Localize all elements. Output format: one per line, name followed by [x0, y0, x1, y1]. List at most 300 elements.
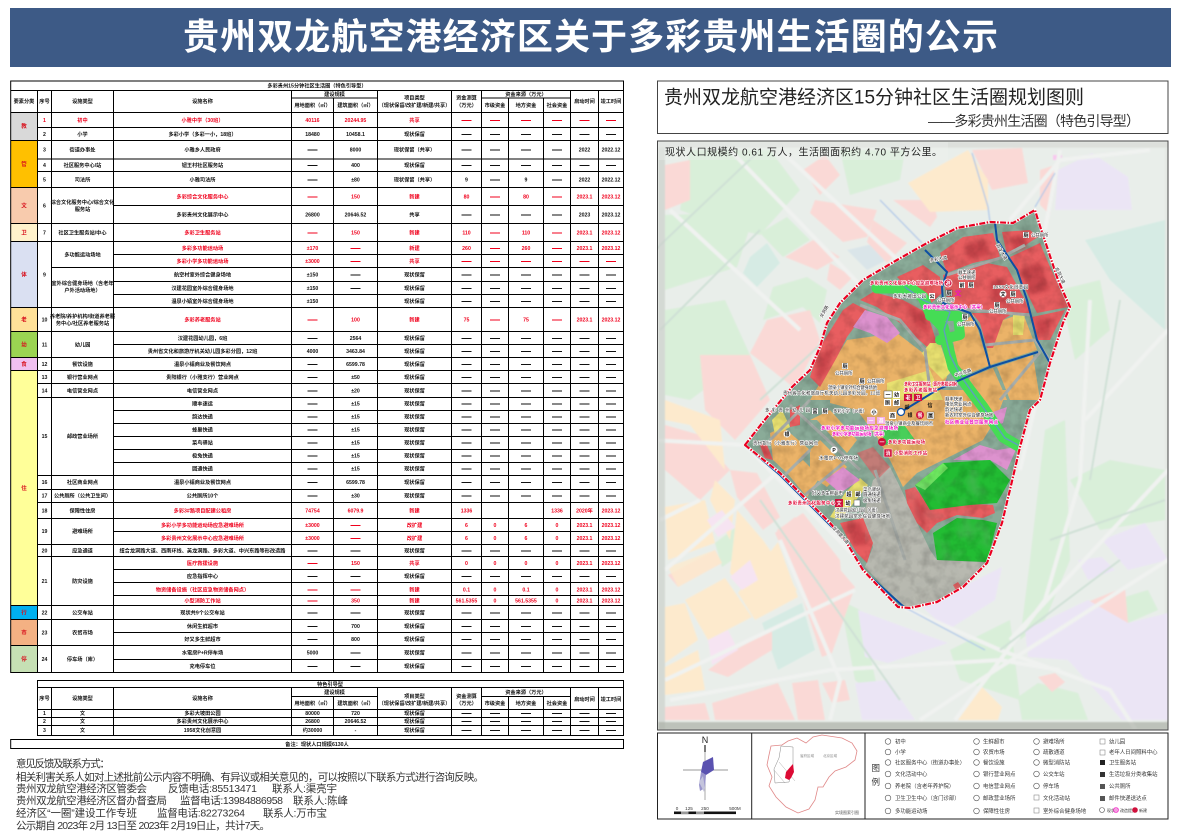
- row 9 体育场地: 多彩多功能运动场: [182, 244, 223, 252]
- legend heading: [872, 763, 880, 787]
- row 19 避难场所: 6: [525, 523, 528, 529]
- legend items: 公共厕所: [1109, 782, 1131, 790]
- legend items: 社区服务中心（街道办事处）: [895, 758, 965, 766]
- row 9 体育场地: 户外活动场地）: [64, 286, 101, 294]
- row 7 社区卫生服务站: 110: [462, 230, 471, 236]
- row 1 初中: ——————: [462, 115, 616, 126]
- row 15 邮政营业场所: 15: [42, 434, 47, 440]
- row 19 避难场所: ±3000: [305, 536, 320, 542]
- map labels: 菜鸟驿站: [863, 486, 881, 493]
- row 19 避难场所: 0: [556, 536, 559, 542]
- row 19 避难场所: [42, 520, 620, 544]
- contact text block: 公示期自 2023年 2月 13日至 2023年 2月19日止，共计7天。: [16, 819, 270, 832]
- row 1 初中: 1: [43, 118, 46, 124]
- map icons: 邮: [894, 400, 899, 406]
- row 9 体育场地: 2023.1: [577, 246, 593, 252]
- location map: 实境图索引图: [835, 809, 859, 815]
- contact text block: 监督电话:13984886958: [180, 794, 283, 807]
- row 5 司法所: [43, 174, 620, 186]
- location map: [767, 735, 859, 815]
- row 5 司法所: 2022.12: [602, 178, 620, 184]
- row 18 保障性住房: [42, 506, 620, 514]
- table category color cells: 食: [21, 360, 27, 368]
- row 22 公交车站: 现状保留: [404, 608, 425, 616]
- table column headers: 地方资金: [516, 101, 537, 109]
- map labels: 汉建花园室外综合健身场地: [835, 512, 891, 520]
- row 21 防灾设施: 医疗救援设施: [187, 559, 219, 567]
- table category color cells: 卫: [21, 230, 27, 236]
- row 2 小学: 小学: [77, 130, 88, 138]
- contact text block: 联系人:渠亮宇: [272, 782, 337, 795]
- row 3 街道办事处: 3: [43, 148, 46, 154]
- map icons: 厕: [962, 314, 968, 321]
- featured table headers: 竣工时间: [601, 695, 621, 703]
- row 13 银行营业网点: ±50: [351, 375, 360, 381]
- row 18 保障性住房: 74754: [305, 508, 320, 514]
- row 16 社区商业网点: 6599.78: [346, 480, 365, 486]
- panel: facility table: [11, 81, 623, 672]
- contact text block: 意见反馈及联系方式：: [16, 757, 110, 770]
- row 11 幼儿园: 现状保留: [404, 334, 425, 342]
- map labels: 多彩贵州文化展示中心（共享）: [923, 304, 985, 310]
- legend items: 农贸市场: [983, 748, 1005, 756]
- map labels: 温泉小镇商业及餐饮网点: [885, 420, 934, 427]
- featured row 3: 约30000: [303, 726, 322, 734]
- row 16 社区商业网点: [42, 477, 616, 488]
- row 23 农贸市场: 休闲生鲜超市: [187, 622, 218, 630]
- row 9 体育场地: 现状保留: [404, 297, 425, 305]
- featured row 3: 3: [43, 728, 46, 734]
- row 21 防灾设施: —: [308, 558, 318, 569]
- featured row 3: -: [355, 728, 357, 734]
- table category color cells: 老: [21, 316, 27, 324]
- legend items: 邮政营业场所: [983, 794, 1016, 802]
- row 2 小学: ——————: [462, 129, 616, 140]
- row 1 初中: 小雅中学（30班）: [181, 116, 224, 124]
- row 17 公共厕所: 现状保留: [404, 492, 425, 500]
- row 6 综合文化服务中心: 150: [351, 194, 360, 200]
- map labels: 龙洞大道: [1053, 266, 1067, 285]
- legend items: 幼儿园: [1109, 738, 1125, 746]
- map labels: 多彩小学（18班）: [833, 408, 867, 414]
- map labels: 中兴东路: [953, 367, 973, 379]
- row 21 防灾设施: 物资储备设施（社区应急物资储备网点）: [156, 586, 249, 594]
- row 3 街道办事处: 2022: [579, 148, 590, 154]
- map title box: [658, 81, 1168, 134]
- map icons: 属: [928, 414, 933, 420]
- table category color cells: 市: [21, 628, 27, 636]
- row 9 体育场地: ———————: [350, 256, 616, 267]
- featured table headers: 设施名称: [192, 694, 214, 702]
- map icons: 避: [878, 418, 884, 424]
- row 10 养老: 多彩养老服务站: [184, 316, 221, 324]
- map labels: 水電房P+R停车场: [819, 454, 859, 462]
- row 1 初中: [43, 115, 616, 126]
- row 11 幼儿园: 4000: [307, 349, 318, 355]
- row 9 体育场地: ±3000: [305, 259, 320, 265]
- row 9 体育场地: ±170: [307, 246, 318, 252]
- map labels: 好又多生鲜超市: [812, 490, 844, 496]
- table category color cells: 停: [21, 655, 27, 663]
- row 12 餐饮设施: ———————: [308, 359, 616, 370]
- panel: featured guidance table: [38, 680, 624, 736]
- featured table headers: 社会资金: [547, 699, 568, 707]
- icon: north compass: [683, 735, 728, 800]
- map labels: 顺丰快递: [945, 396, 963, 402]
- row 9 体育场地: 新建: [409, 244, 420, 252]
- featured row 1: 720: [351, 711, 360, 717]
- row 5 司法所: ±80: [351, 178, 360, 184]
- row 19 避难场所: 避难场所: [72, 527, 94, 535]
- map icons: 幼: [894, 392, 899, 398]
- zones: pink: [825, 310, 1017, 493]
- legend items: 微型消防站: [1043, 758, 1071, 766]
- map icons: 厕: [994, 302, 1000, 309]
- map icons: 小: [871, 409, 877, 416]
- row 18 保障性住房: 6079.9: [348, 508, 364, 514]
- table column headers: （现状保留/改扩建/新建/共享）: [379, 101, 450, 109]
- legend items: 生鲜超市: [983, 738, 1005, 746]
- table category color cells: 体: [21, 270, 27, 278]
- map icons: 一: [885, 392, 891, 398]
- row 23 农贸市场: 23: [42, 630, 47, 636]
- zone: gray construction site: [863, 467, 987, 608]
- row 15 邮政营业场所: ±15: [351, 466, 360, 472]
- legend items: 多功能运动场: [895, 807, 928, 815]
- row 15 邮政营业场所: 蜂巢快递: [192, 426, 214, 434]
- row 19 避难场所: 2023.1: [577, 536, 593, 542]
- map labels: 1958文化创意园: [993, 284, 1029, 290]
- row 17 公共厕所: 公共厕所10个: [187, 492, 219, 500]
- row 24 停车场: 充电停车位: [190, 662, 215, 670]
- map roads dark blue: [747, 223, 1050, 608]
- row 24 停车场: 现状保留: [404, 662, 425, 670]
- featured table headers: 地方资金: [516, 699, 537, 707]
- row 6 综合文化服务中心: 多彩贵州文化展示中心: [177, 210, 229, 218]
- row 13 银行营业网点: 银行营业网点: [67, 373, 99, 381]
- row 19 避难场所: —: [350, 520, 360, 531]
- featured row 3: ——————: [462, 725, 616, 736]
- row 21 防灾设施: 150: [351, 561, 360, 567]
- row 15 邮政营业场所: 现状保留: [404, 400, 425, 408]
- row 7 社区卫生服务站: 150: [351, 230, 360, 236]
- table column headers: 建设规模: [324, 90, 346, 98]
- map icons: 富: [812, 408, 818, 415]
- row 23 农贸市场: [42, 621, 616, 645]
- map labels: 温泉小镇室外综合健身场地: [828, 384, 878, 391]
- row 17 公共厕所: [42, 490, 616, 502]
- map icons: 厕: [842, 363, 848, 370]
- featured row 1: 现状保留: [404, 709, 425, 717]
- featured row 1: [43, 708, 616, 719]
- row 22 公交车站: ————————: [308, 608, 616, 618]
- row 17 公共厕所: ———————: [308, 490, 616, 502]
- row 12 餐饮设施: 6599.78: [346, 362, 365, 368]
- row 24 停车场: ———————: [350, 648, 616, 658]
- row 6 综合文化服务中心: 2023.1: [577, 194, 593, 200]
- row 21 防灾设施: 561.5355: [456, 598, 477, 604]
- featured row 1: 文: [80, 709, 86, 717]
- row 10 养老: 10: [42, 318, 47, 324]
- featured table grid lines: [38, 680, 624, 736]
- row 4 社区服务中心: ———————: [308, 160, 616, 171]
- table column headers: 资金来源（万元）: [505, 90, 547, 98]
- featured row 1: 80000: [305, 711, 320, 717]
- row 20 应急通道: 20: [42, 548, 47, 554]
- row 21 防灾设施: 防灾设施: [72, 577, 94, 585]
- row 9 体育场地: 多功能运动场地: [64, 250, 101, 258]
- featured row 1: 1: [43, 711, 46, 717]
- row 23 农贸市场: ———————: [308, 634, 616, 645]
- row 9 体育场地: 260: [522, 246, 530, 252]
- table category color cells: 管: [21, 160, 27, 168]
- row 15 邮政营业场所: 邮政营业场所: [67, 432, 99, 440]
- row 15 邮政营业场所: ±15: [351, 440, 360, 446]
- row 16 社区商业网点: 现状保留: [404, 478, 425, 486]
- row 7 社区卫生服务站: 110: [522, 230, 530, 236]
- map labels: 汉建花园幼儿园（6班）: [835, 506, 880, 514]
- row 21 防灾设施: 0: [525, 561, 528, 567]
- map labels: 多彩贵州文化服务中心: [788, 500, 836, 506]
- row 15 邮政营业场所: ———————: [308, 424, 616, 436]
- map labels: 多彩养老服务站: [904, 386, 938, 394]
- row 15 邮政营业场所: ———————: [308, 398, 616, 410]
- zones: red commercial: [758, 230, 1068, 592]
- row 6 综合文化服务中心: 新建: [409, 192, 420, 200]
- row 15 邮政营业场所: 极兔快递: [192, 452, 214, 460]
- map icons: 厕: [822, 408, 828, 415]
- row 21 防灾设施: 2023.12: [602, 598, 620, 604]
- row 15 邮政营业场所: 顺丰速运: [192, 400, 214, 408]
- row 15 邮政营业场所: 现状保留: [404, 426, 425, 434]
- row 21 防灾设施: 现状保留: [404, 572, 425, 580]
- table column headers: （万元）: [456, 102, 477, 109]
- row 2 小学: 现状保留: [404, 130, 425, 138]
- map labels: [753, 232, 1067, 546]
- icon: north compass: N: [702, 735, 708, 745]
- row 21 防灾设施: 0.1: [463, 588, 470, 594]
- row 11 幼儿园: 汉建花园幼儿园，6班: [178, 334, 228, 342]
- row 11 幼儿园: 11: [42, 342, 47, 348]
- row 23 农贸市场: 现状保留: [404, 635, 425, 643]
- legend items: 疏散通道: [1043, 748, 1065, 756]
- row 2 小学: 2: [43, 132, 46, 138]
- map labels: 韵达快递: [945, 406, 963, 413]
- row 19 避难场所: 6: [465, 536, 468, 542]
- row 11 幼儿园: 2564: [350, 336, 361, 342]
- row 9 体育场地: 航空村室外综合健身场地: [174, 270, 232, 278]
- table note: 备注：现状人口规模6130人: [285, 740, 350, 748]
- row 24 停车场: ————————: [308, 661, 616, 672]
- featured row 2: 26800: [305, 719, 320, 725]
- row 10 养老: 75: [464, 318, 469, 324]
- map labels: 社区商业及餐饮服务网点: [945, 418, 999, 426]
- row 15 邮政营业场所: 现状保留: [404, 452, 425, 460]
- row 13 银行营业网点: [42, 372, 616, 383]
- row 18 保障性住房: 2023.12: [602, 508, 620, 514]
- row 16 社区商业网点: 温泉小镇商业及餐饮网点: [174, 478, 232, 486]
- row 21 防灾设施: —: [308, 596, 318, 606]
- row 15 邮政营业场所: ±15: [351, 428, 360, 434]
- row 11 幼儿园: 现状保留: [404, 347, 425, 355]
- row 19 避难场所: 多彩小学多功能运动场应急避难场所: [161, 521, 245, 529]
- row 11 幼儿园: 3463.84: [346, 349, 365, 355]
- row 19 避难场所: 2023.1: [577, 523, 593, 529]
- row 6 综合文化服务中心: 2023: [579, 212, 590, 218]
- row 12 餐饮设施: [42, 359, 616, 370]
- map icons: 厕: [1010, 291, 1016, 298]
- map labels: 公共厕所: [958, 274, 976, 281]
- map labels: 多彩多功能运动场: [888, 438, 926, 446]
- map labels: 多彩小学多功能运动场（共享）: [832, 430, 887, 438]
- zones: orange residential: [770, 313, 1040, 497]
- row 9 体育场地: ——————: [462, 296, 616, 307]
- map icons: 厕: [968, 282, 974, 289]
- map icons: 幼: [845, 500, 851, 507]
- row 22 公交车站: 22: [42, 610, 47, 616]
- row 20 应急通道: 现状保留: [404, 546, 425, 554]
- legend items: 老年人日间照料中心: [1109, 748, 1158, 756]
- row 22 公交车站: 现状共9个公交车站: [180, 608, 226, 616]
- map labels: 龙洞堡大道: [831, 525, 851, 546]
- map icons: 一: [879, 440, 885, 446]
- featured row 2: 20646.52: [345, 719, 366, 725]
- row 7 社区卫生服务站: [43, 228, 620, 238]
- row 3 街道办事处: 街道办事处: [70, 146, 96, 154]
- featured table headers: 设施类型: [72, 694, 93, 702]
- contact text block: 联系人:万市宝: [263, 806, 327, 820]
- row 10 养老: 2023.12: [602, 318, 620, 324]
- featured table headers: 建设规模: [324, 688, 346, 696]
- row 19 避难场所: 2023.12: [602, 536, 620, 542]
- table category color cells: 幼: [21, 340, 27, 348]
- row 14 电信营业网点: ———————: [308, 386, 616, 396]
- row 3 街道办事处: [43, 145, 620, 156]
- legend items: 初中: [895, 738, 906, 746]
- map icons: 一: [868, 418, 874, 424]
- row 18 保障性住房: 1336: [551, 508, 563, 514]
- row 20 应急通道: 应急通道: [72, 546, 94, 554]
- row 24 停车场: [42, 648, 616, 672]
- row 19 避难场所: 6: [525, 536, 528, 542]
- table category color cells: [11, 112, 38, 672]
- row 19 避难场所: 0: [494, 536, 497, 542]
- map labels: 多彩小学多功能运动场应急避难场所: [821, 424, 899, 432]
- row 5 司法所: 9: [465, 178, 468, 184]
- row 6 综合文化服务中心: 共享: [409, 210, 420, 218]
- row 15 邮政营业场所: ±15: [351, 414, 360, 420]
- map labels: 多彩大坡田公园: [893, 292, 927, 300]
- row 19 避难场所: ±3000: [305, 523, 320, 529]
- legend items: 保障性住房: [983, 807, 1010, 815]
- row 6 综合文化服务中心: 80: [464, 194, 469, 200]
- legend items: 改造提升: [1120, 807, 1136, 813]
- row 21 防灾设施: 2023.12: [602, 588, 620, 594]
- table note: [11, 740, 623, 748]
- row 21 防灾设施: 小型消防工作站: [184, 596, 221, 604]
- row 7 社区卫生服务站: 新建: [409, 228, 420, 236]
- row 16 社区商业网点: 社区商业网点: [67, 478, 99, 486]
- featured row 1: ——————: [462, 708, 616, 719]
- map icons: 超: [846, 491, 852, 498]
- map labels: 公共厕所: [989, 308, 1007, 314]
- row 10 养老: 务中心/社区养老服务站: [56, 319, 110, 327]
- map labels: 公共厕所: [937, 296, 955, 304]
- table column headers: 资金测算: [456, 94, 477, 102]
- row 9 体育场地: 多彩小学多功能运动场: [177, 257, 228, 265]
- table grid lines: [11, 81, 623, 672]
- row 18 保障性住房: 保障性住房: [70, 506, 95, 514]
- legend box: [658, 733, 1168, 819]
- contact text block: [16, 757, 484, 832]
- row 14 电信营业网点: 现状保留: [404, 386, 425, 394]
- row 21 防灾设施: 2023.1: [577, 561, 593, 567]
- featured row 2: ——————: [462, 716, 616, 727]
- row 9 体育场地: 室外综合健身场地（含老年: [51, 279, 114, 287]
- row 2 小学: [43, 129, 616, 140]
- featured table headers: [39, 688, 621, 707]
- map labels: 贵州银行（小雅支行）营业网点: [753, 440, 819, 446]
- row 9 体育场地: 260: [462, 246, 471, 252]
- row 4 社区服务中心: 钮王村社区服务站: [182, 161, 224, 169]
- map labels: 极兔快递: [863, 497, 881, 504]
- row 19 避难场所: 0: [556, 523, 559, 529]
- row 15 邮政营业场所: ———————: [308, 438, 616, 448]
- row 9 体育场地: 2023.12: [602, 246, 620, 252]
- map icons: 文: [836, 500, 842, 507]
- featured table headers: 序号: [39, 694, 50, 702]
- row 9 体育场地: 温泉小镇室外综合健身场地: [171, 297, 234, 305]
- row 3 街道办事处: —————: [308, 145, 562, 156]
- table column headers: 竣工时间: [601, 97, 621, 105]
- map icons: 避: [945, 280, 951, 287]
- map labels: 电信营业网点: [945, 400, 972, 408]
- legend items: 养老院（含老年养护院）: [895, 782, 954, 790]
- map labels: 公共厕所: [957, 320, 975, 328]
- map icons: 信: [927, 402, 933, 409]
- map frame: [658, 141, 1168, 730]
- featured row 1: 多彩大坡田公园: [184, 709, 221, 717]
- table column headers: 建筑面积（㎡）: [337, 101, 374, 109]
- featured row 3: 1958文化创意园: [184, 726, 221, 734]
- table column headers: 市级资金: [485, 101, 506, 109]
- row 18 保障性住房: 18: [42, 508, 47, 514]
- row 21 防灾设施: 0: [494, 598, 497, 604]
- map labels: 顺丰速递: [958, 269, 976, 276]
- table column headers: 要素分类: [14, 97, 35, 105]
- legend items: 避难场所: [1043, 738, 1065, 746]
- legend items: 现状: [1107, 807, 1115, 813]
- legend items: [885, 738, 1158, 815]
- row 14 电信营业网点: 14: [42, 388, 47, 394]
- row 5 司法所: 9: [525, 178, 528, 184]
- row 10 养老: 75: [523, 318, 529, 324]
- map icons: 银: [907, 412, 913, 419]
- row 1 初中: 20244.95: [345, 118, 366, 124]
- scale bar: 500M: [729, 806, 741, 811]
- row 12 餐饮设施: 12: [42, 362, 47, 368]
- map icons: 商: [890, 412, 895, 420]
- featured row 3: [43, 725, 616, 736]
- table column headers: 用地面积（㎡）: [294, 101, 331, 109]
- map labels: 多彩贵州幼儿园: [765, 406, 811, 414]
- row 9 体育场地: 现状保留: [404, 284, 425, 292]
- map labels: 多彩卫生服务站（医疗救援设施）: [904, 380, 960, 388]
- row 11 幼儿园: ——————: [462, 346, 616, 357]
- row 19 避难场所: 6: [465, 523, 468, 529]
- legend items: 电信营业网点: [983, 782, 1016, 790]
- row 15 邮政营业场所: 圆通快递: [192, 464, 214, 472]
